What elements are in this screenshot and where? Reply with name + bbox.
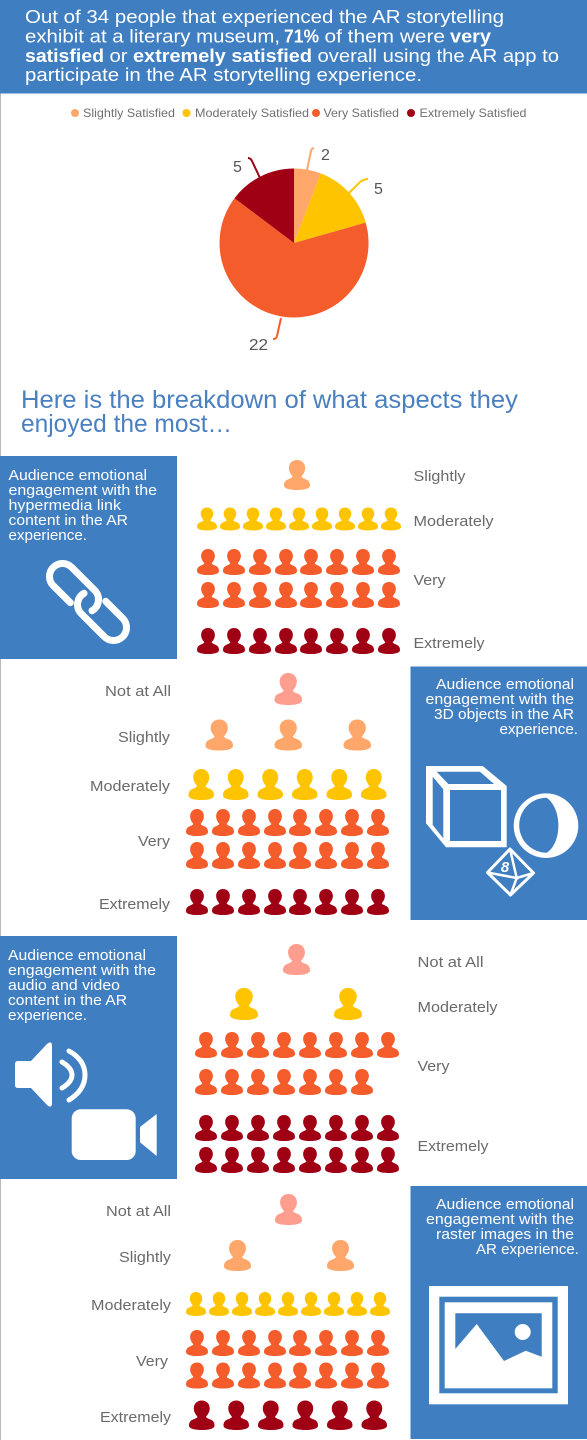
icon: octahedron die: 8 [501,859,510,876]
panel: audio and video: Audience emotional [8,948,146,964]
pie chart: 22 [249,337,268,354]
pictogram: 3D objects ratings: Not at All [105,683,171,700]
panel: audio and video: engagement with the [8,963,156,979]
pictogram: hypermedia link ratings: Moderately [414,513,494,530]
pictogram: raster images ratings: Extremely [100,1409,172,1426]
panel: hypermedia link: experience. [8,528,87,544]
panel: hypermedia link [0,456,177,659]
icon: chain link [49,563,127,641]
header banner: exhibit at a literary museum, [25,26,280,46]
panel: 3D objects: Audience emotional [436,677,574,693]
pie chart: 5 [233,159,242,176]
header banner: extremely satisfied [133,45,312,66]
panel: hypermedia link: hypermedia link [8,498,122,514]
header banner: overall using the AR app to [318,45,559,66]
panel: hypermedia link: content in the AR [8,513,128,529]
pictogram: raster images ratings [91,1194,390,1430]
pictogram: audio and video ratings: Not at All [418,954,484,971]
section heading [21,386,518,438]
panel: audio and video: experience. [8,1008,87,1024]
header banner: very [450,26,492,46]
panel: audio and video [0,936,177,1179]
legend: Moderately Satisfied [195,106,309,120]
header banner: or [110,45,128,66]
pictogram: raster images ratings: Not at All [106,1203,171,1220]
pictogram: raster images ratings: Slightly [119,1249,172,1266]
pictogram: audio and video ratings: Moderately [418,999,498,1016]
pie chart: 2 [321,147,330,164]
pie chart: 5 [374,181,383,198]
section heading: enjoyed the most… [21,410,232,438]
header banner: 71% [284,26,319,46]
legend: Slightly Satisfied [83,106,175,120]
icon: speaker [15,1042,85,1107]
pictogram: 3D objects ratings: Very [138,833,171,850]
legend [71,106,526,120]
icon: sphere [514,793,578,858]
icon: video camera [72,1109,157,1160]
pictogram: hypermedia link ratings: Very [414,572,446,589]
icon: framed picture [429,1286,568,1404]
icon: cube [426,766,507,847]
legend: Very Satisfied [324,106,399,120]
panel: hypermedia link: Audience emotional [8,468,147,484]
section heading: Here is the breakdown of what aspects they [21,386,518,414]
pictogram: audio and video ratings: Very [418,1058,450,1075]
header banner: satisfied [25,45,104,66]
pictogram: hypermedia link ratings [197,460,494,654]
panel: 3D objects: engagement with the [426,692,574,708]
pictogram: audio and video ratings [195,944,498,1173]
header banner [0,0,587,94]
pictogram: 3D objects ratings: Slightly [118,729,171,746]
header banner: participate in the AR storytelling experience. [25,64,422,85]
pictogram: audio and video ratings: Extremely [418,1138,489,1155]
panel: raster images [410,1186,587,1439]
panel: 3D objects: 3D objects in the AR [434,707,574,723]
panel: raster images: engagement with the [426,1212,574,1228]
icon: octahedron die [488,849,534,895]
panel: raster images: AR experience. [476,1242,579,1258]
pictogram: 3D objects ratings: Extremely [99,896,171,913]
panel: raster images: raster images in the [436,1227,574,1243]
header banner: of them were [324,26,445,46]
pie chart [220,147,383,354]
panel: raster images: Audience emotional [436,1197,574,1213]
pictogram: 3D objects ratings: Moderately [90,778,171,795]
legend: Extremely Satisfied [420,106,526,120]
pictogram: raster images ratings: Moderately [91,1297,172,1314]
panel: hypermedia link: engagement with the [8,483,157,499]
header banner: Out of 34 people that experienced the AR storytelling [25,6,504,27]
panel: audio and video: audio and video [8,978,120,994]
pictogram: 3D objects ratings [90,673,389,915]
pictogram: hypermedia link ratings: Extremely [414,635,485,652]
panel: 3D objects: experience. [500,722,578,738]
pictogram: raster images ratings: Very [136,1353,169,1370]
panel: audio and video: content in the AR [8,993,127,1009]
pictogram: hypermedia link ratings: Slightly [414,468,466,485]
panel: 3D objects [410,666,587,920]
